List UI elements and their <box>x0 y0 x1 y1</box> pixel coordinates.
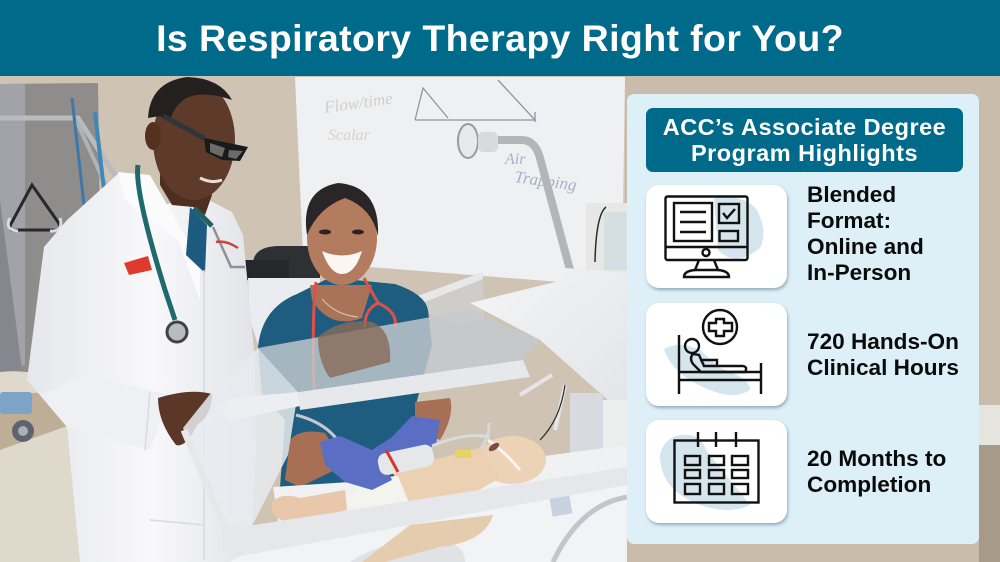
text: blended format: Blended <box>807 182 896 207</box>
text: blended format: In-Person <box>807 260 911 285</box>
text: blended format: Online and <box>807 234 924 259</box>
background desk and monitor <box>245 246 484 345</box>
panel heading <box>646 108 963 172</box>
panel heading: Program Highlights <box>691 140 918 166</box>
whiteboard: Scalar <box>328 127 371 144</box>
gloved hands and resuscitation bag <box>320 416 490 490</box>
title banner <box>0 0 1000 76</box>
man in white coat <box>27 77 256 562</box>
incubator bed sheet <box>273 445 627 535</box>
panel: program highlights <box>627 94 979 544</box>
whiteboard: Flow/time <box>322 88 394 117</box>
floor and left equipment <box>0 83 118 562</box>
text: blended format <box>807 182 924 285</box>
whiteboard: Trapping <box>513 167 578 195</box>
procedure lamp and wall monitor <box>458 124 627 275</box>
text: clinical hours: 720 Hands-On <box>807 329 959 354</box>
incubator top unit <box>470 268 627 417</box>
whiteboard <box>295 77 625 282</box>
text: clinical hours <box>807 329 959 380</box>
icon card: computer <box>646 185 787 288</box>
panel heading: ACC’s Associate Degree <box>663 114 946 140</box>
infant simulator manikin <box>272 436 546 522</box>
text: months to completion: 20 Months to <box>807 446 946 471</box>
incubator support column <box>520 375 627 478</box>
text: clinical hours: Clinical Hours <box>807 355 959 380</box>
whiteboard: Air <box>504 151 526 168</box>
incubator acrylic hood <box>183 310 540 530</box>
icon card: calendar <box>646 420 787 523</box>
text: months to completion <box>807 446 946 497</box>
incubator frame rail <box>184 430 627 562</box>
title banner: Is Respiratory Therapy Right for You? <box>156 17 844 59</box>
nurse in blue scrubs <box>258 183 451 487</box>
text: months to completion: Completion <box>807 472 931 497</box>
icon card: hospital bed <box>646 303 787 406</box>
text: blended format: Format: <box>807 208 891 233</box>
